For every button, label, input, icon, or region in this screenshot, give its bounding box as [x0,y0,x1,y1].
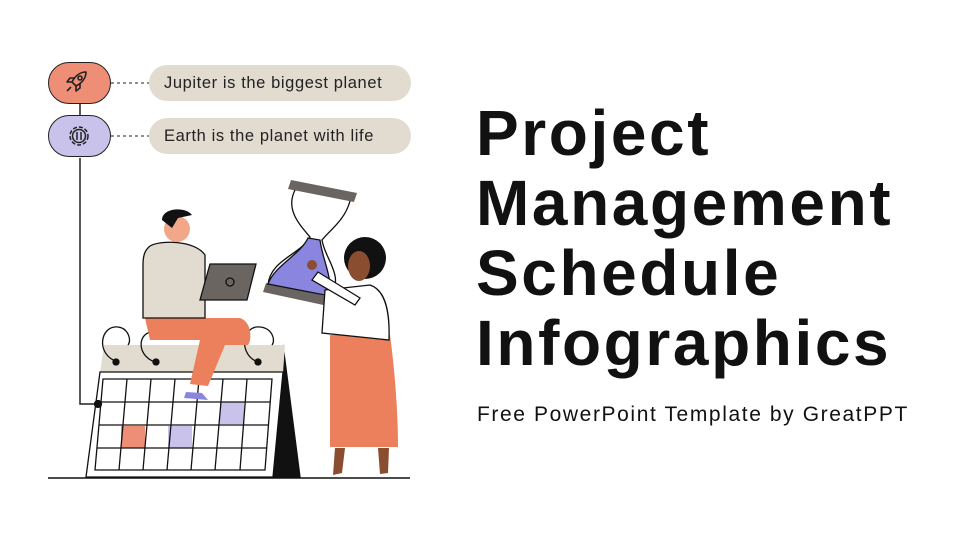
hourglass [288,180,357,202]
calendar [268,345,300,477]
title: Infographics [476,307,891,379]
title: Management [476,167,893,239]
title: Project [476,97,711,169]
pill: Earth [149,118,411,154]
man [145,318,250,386]
title: Schedule [476,237,781,309]
icon: gear [48,115,111,157]
pill: Earth: Earth is the planet with life [164,127,374,145]
pill: Jupiter [149,65,411,101]
woman [333,448,389,475]
subtitle: Free PowerPoint Template by GreatPPT [477,403,909,426]
icon: rocket [48,62,111,104]
pill: Jupiter: Jupiter is the biggest planet [164,74,382,92]
title [476,97,893,379]
